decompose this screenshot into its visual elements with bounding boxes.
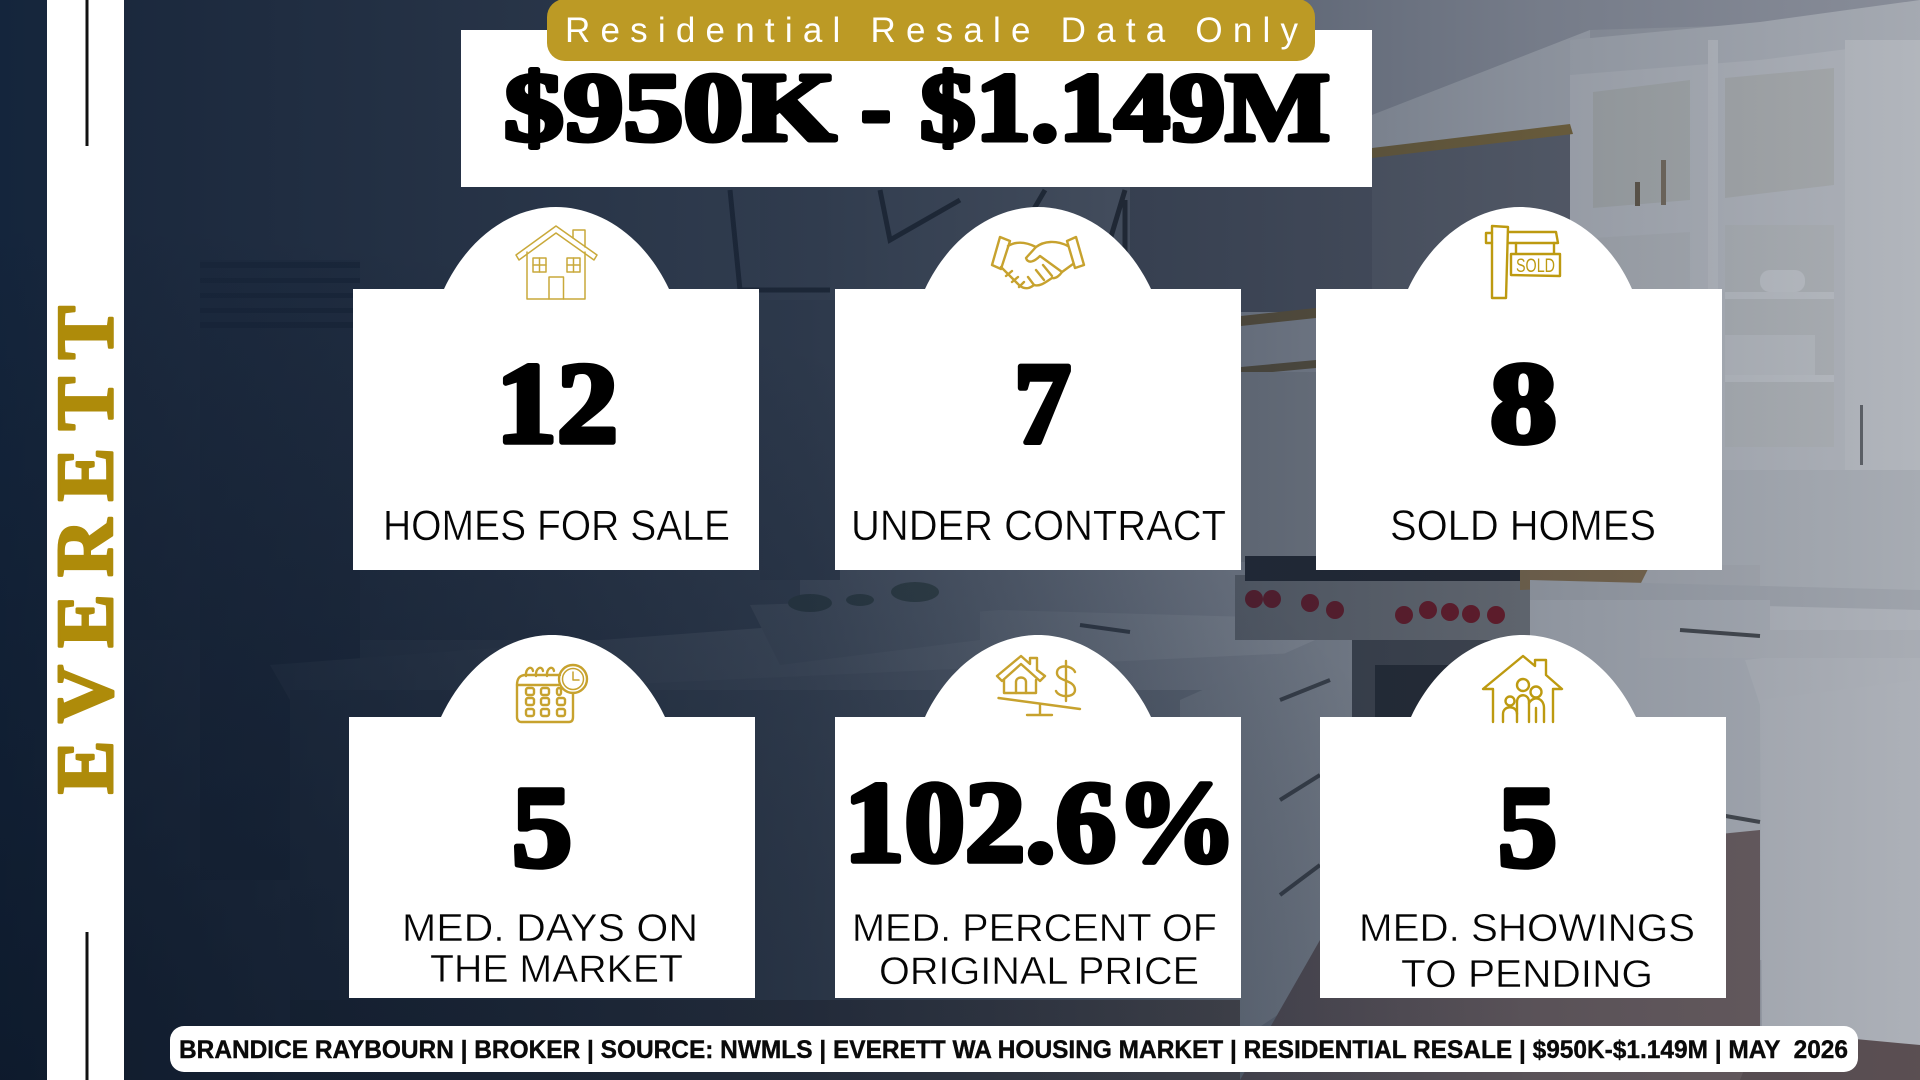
icon: house and dollar on scale (997, 656, 1080, 715)
label: ORIGINAL PRICE (879, 950, 1199, 993)
icon: handshake (992, 237, 1084, 288)
label: UNDER CONTRACT (851, 502, 1226, 550)
label: SOLD HOMES (1390, 502, 1656, 550)
number: 8 (1490, 340, 1557, 468)
panel: sold homes (1316, 207, 1722, 570)
number: 12 (496, 340, 618, 468)
label: MED. DAYS ON (402, 907, 698, 950)
icon: house (516, 226, 597, 299)
number: 5 (512, 764, 572, 892)
label (402, 907, 698, 991)
number: 102.6% (844, 759, 1237, 887)
label: MED. PERCENT OF (852, 907, 1217, 950)
panel: median percent of original price (835, 635, 1241, 998)
label: MED. SHOWINGS (1359, 907, 1695, 950)
panel: median showings to pending (1320, 635, 1726, 998)
number: 7 (1014, 340, 1071, 468)
subtitle pill: Residential Resale Data Only (565, 11, 1298, 50)
footer: source bar (170, 1026, 1858, 1072)
icon: calendar with clock (517, 665, 587, 722)
panel: under contract (835, 207, 1241, 570)
icon: family in house (1483, 656, 1562, 722)
number: 5 (1498, 764, 1557, 892)
label: HOMES FOR SALE (383, 502, 730, 550)
title: price range: - (861, 54, 891, 161)
label: THE MARKET (430, 948, 683, 991)
icon: sold sign (1486, 226, 1560, 298)
panel: homes for sale (353, 207, 759, 570)
title: price range: $950K (504, 54, 836, 161)
subtitle pill (547, 0, 1315, 61)
panel: median days on the market (349, 635, 755, 998)
label (852, 907, 1217, 993)
left white stripe with vertical city name (42, 0, 130, 1080)
icon: sold sign: SOLD (1516, 256, 1555, 277)
title: price range: $1.149M (920, 54, 1330, 161)
header: price range panel (461, 0, 1372, 187)
label: TO PENDING (1401, 953, 1653, 996)
footer: source bar: BRANDICE RAYBOURN | BROKER | SOURCE: NWMLS | EVERETT WA HOUSING MARKET | RESIDENTIAL RESALE | $950K-$1.149M | MAY 2026 (179, 1036, 1848, 1064)
label (1359, 907, 1695, 996)
city name: EVERETT: EVERETT (42, 306, 130, 794)
title: price range (504, 54, 1330, 161)
